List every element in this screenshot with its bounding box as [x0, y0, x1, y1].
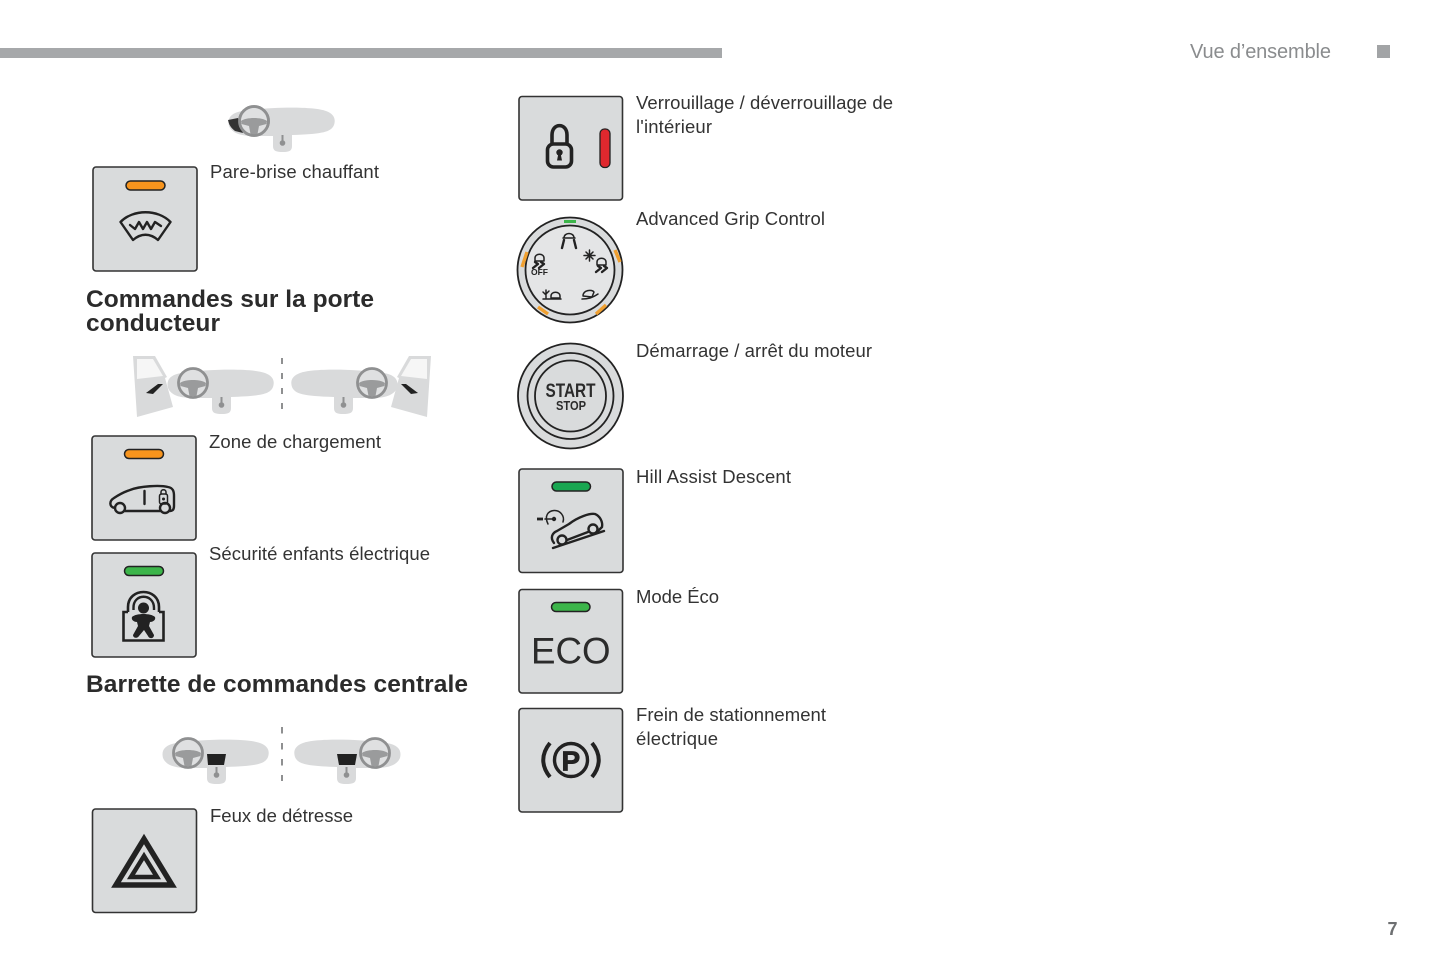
heading: driver door controls: Commandes sur la porte [86, 286, 374, 313]
heading: driver door controls [86, 286, 374, 337]
label: electric parking brake [636, 704, 826, 749]
button: start stop [518, 344, 623, 448]
locator: driver door controls [133, 356, 431, 417]
button: eco mode: ECO [531, 630, 610, 672]
label: interior locking: l'intérieur [636, 116, 712, 137]
button: load area [92, 436, 196, 540]
label: load area: Zone de chargement [209, 431, 381, 452]
heading: driver door controls: conducteur [86, 310, 220, 337]
section marker square [1377, 45, 1390, 58]
label: electric parking brake: électrique [636, 728, 718, 749]
label: child lock: Sécurité enfants électrique [209, 543, 430, 564]
dial: advanced grip control: OFF [531, 267, 548, 277]
button: hazard lights [92, 809, 196, 912]
label: start stop: Démarrage / arrêt du moteur [636, 340, 872, 361]
locator: heated windscreen [228, 106, 335, 152]
button: hill assist descent [519, 469, 623, 572]
label: advanced grip control: Advanced Grip Control [636, 208, 825, 229]
button: electric parking brake [519, 708, 622, 812]
button: eco mode [519, 590, 622, 693]
label: electric parking brake: Frein de stationnement [636, 704, 826, 725]
label: hill assist descent: Hill Assist Descent [636, 466, 791, 487]
dial: advanced grip control [518, 218, 622, 322]
button: child lock [92, 553, 196, 657]
button: interior locking [519, 96, 622, 200]
page number: 7 [1388, 919, 1398, 939]
locator: central control strip [163, 727, 400, 784]
label: interior locking: Verrouillage / déverrouillage de [636, 92, 893, 113]
button: heated windscreen [93, 167, 197, 271]
button: start stop: START [546, 380, 596, 402]
label: interior locking [636, 92, 893, 137]
label: heated windscreen: Pare-brise chauffant [210, 161, 379, 182]
button: electric parking brake: P [562, 746, 580, 776]
label: hazard lights: Feux de détresse [210, 805, 353, 826]
section title: Vue d’ensemble [1190, 41, 1331, 63]
button: start stop: STOP [556, 399, 586, 413]
header bar [0, 48, 722, 58]
heading: central control strip: Barrette de commandes centrale [86, 671, 468, 698]
label: eco mode: Mode Éco [636, 586, 719, 607]
